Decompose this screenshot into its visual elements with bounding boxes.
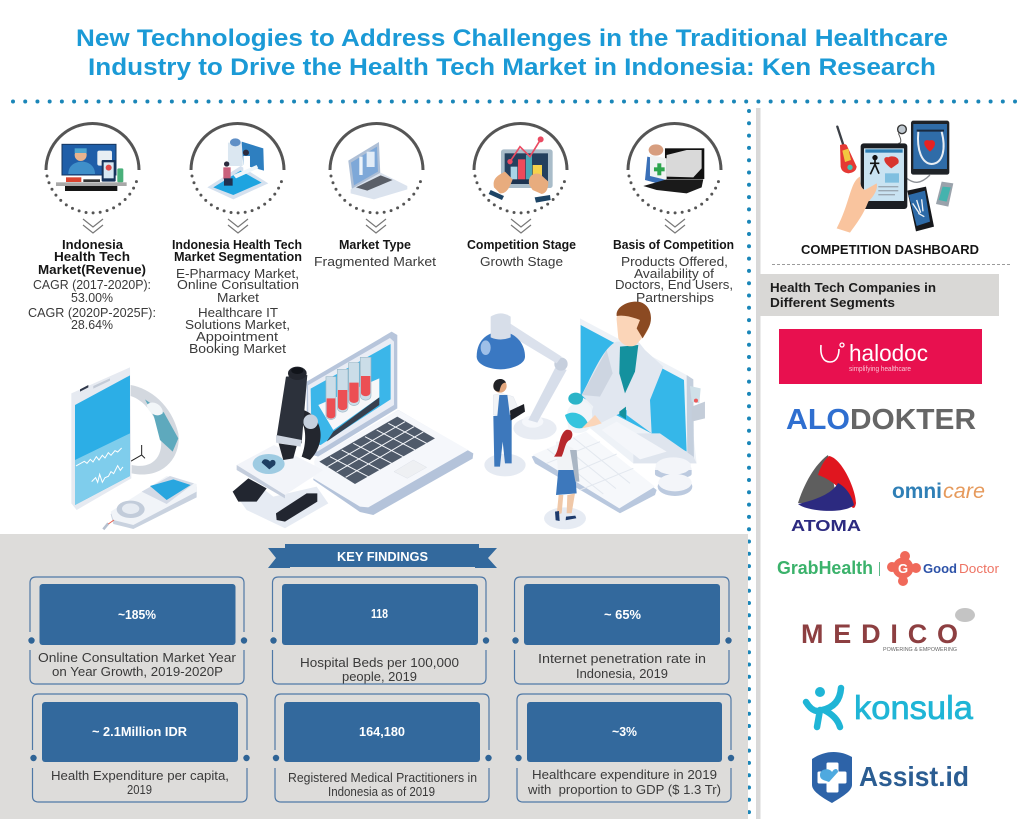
logo: alodokter: DOKTER: [850, 404, 976, 436]
icon: telehealth monitor: [46, 124, 139, 233]
card: hospital beds: people, 2019: [342, 670, 417, 684]
logo: konsula: [806, 687, 974, 727]
heading: market revenue: Indonesia: [62, 238, 124, 252]
card: healthcare expenditure: [515, 694, 734, 802]
heading: health tech companies: Health Tech Companies in: [770, 280, 936, 295]
card: medical practitioners: [273, 694, 492, 802]
logo: omnicare: omni: [892, 480, 942, 503]
text: segments list: Solutions Market,: [185, 318, 290, 332]
card: hospital beds: Hospital Beds per 100,000: [300, 656, 459, 670]
card: internet penetration: [512, 577, 732, 684]
panel: basis of competition column 5: [613, 124, 734, 305]
card: hospital beds: [270, 577, 489, 684]
text: segments list: Appointment: [196, 330, 279, 344]
logo: medico: POWERING & EMPOWERING: [883, 647, 957, 653]
card: hospital beds: 118: [371, 607, 388, 621]
text: CAGR values: CAGR (2017-2020P):: [33, 278, 151, 292]
logo: omnicare: care: [943, 480, 985, 503]
logo: assist.id: [812, 752, 969, 803]
panel: market type column 3: [314, 124, 437, 269]
text: segments list: Healthcare IT: [198, 306, 278, 320]
card: healthcare expenditure: with proportion to GDP ($ 1.3 Tr): [527, 783, 721, 797]
card: online consultation growth: Online Consultation Market Year: [38, 651, 236, 665]
logo: good doctor: [887, 551, 999, 586]
card: medical practitioners: Indonesia as of 2019: [328, 785, 435, 799]
logo: alodokter: ALO: [786, 404, 850, 436]
logo: halodoc: halodoc: [849, 340, 928, 366]
text: bases list: Doctors, End Users,: [615, 278, 733, 292]
text: bases list: [615, 255, 733, 305]
logo: assist.id: Assist.id: [859, 761, 969, 792]
card: medical practitioners: 164,180: [359, 725, 405, 739]
text: segments list: [176, 267, 299, 356]
icon: laptop: [330, 124, 423, 233]
text: segments list: Market: [217, 291, 260, 305]
card: health expenditure: ~ 2.1Million IDR: [92, 725, 187, 739]
card: health expenditure: [30, 694, 250, 802]
logo: good doctor: Doctor: [959, 562, 999, 576]
card: medical practitioners: Registered Medical Practitioners in: [288, 771, 477, 785]
logo: omnicare: [892, 480, 985, 503]
heading: basis of competition: Basis of Competition: [613, 238, 734, 252]
ribbon: key findings heading: KEY FINDINGS: [337, 549, 428, 564]
icon: online consultation phone: [191, 124, 284, 233]
text: bases list: Partnerships: [636, 291, 714, 305]
icon: tablet with chart: [474, 124, 567, 233]
heading: market revenue: Market(Revenue): [38, 263, 146, 277]
icon: doctor in laptop: [628, 124, 721, 233]
heading: market type: Market Type: [339, 238, 411, 252]
panel: key findings: [0, 534, 748, 819]
text: CAGR values: [28, 278, 156, 332]
text: bases list: Products Offered,: [621, 255, 728, 269]
card: internet penetration: Internet penetration rate in: [538, 652, 706, 666]
illustration: microscope and laptop: [233, 332, 473, 528]
card: healthcare expenditure: Healthcare expenditure in 2019: [532, 768, 717, 782]
text: bases list: Availability of: [634, 267, 715, 281]
card: online consultation growth: on Year Growth, 2019-2020P: [52, 665, 223, 679]
logo: halodoc: [779, 329, 982, 384]
heading: market revenue: [38, 238, 146, 277]
panel: competition stage column 4: [467, 124, 576, 269]
logo: medico: [801, 608, 975, 653]
card: internet penetration: ~ 65%: [604, 608, 641, 622]
text: segments list: Online Consultation: [177, 278, 299, 292]
illustration: doctor in monitor with lamp and people: [477, 302, 705, 529]
logo: medico: MEDICO: [801, 619, 958, 649]
text: CAGR values: 53.00%: [71, 291, 113, 305]
card: internet penetration: Indonesia, 2019: [576, 667, 668, 681]
card: healthcare expenditure: ~3%: [612, 725, 637, 739]
panel: market overview column 1: [28, 124, 156, 332]
logo: alodokter: [786, 404, 976, 436]
card: health expenditure: Health Expenditure per capita,: [51, 769, 229, 783]
text: CAGR values: CAGR (2020P-2025F):: [28, 306, 156, 320]
heading: market segmentation: Indonesia Health Tech: [172, 238, 302, 252]
logo: konsula: konsula: [854, 689, 974, 726]
title: Industry to Drive the Health Tech Market in Indonesia: Ken Research: [88, 54, 936, 81]
panel: market segmentation column 2: [172, 124, 302, 356]
heading: competition stage: Competition Stage: [467, 238, 576, 252]
logo: good doctor: G: [898, 561, 908, 576]
heading: market segmentation: [172, 238, 302, 264]
card: online consultation growth: ~185%: [118, 608, 156, 622]
title: [76, 25, 948, 81]
heading: health tech companies: Different Segments: [770, 295, 895, 310]
heading: health tech companies: [760, 274, 999, 316]
text: growth stage: Growth Stage: [480, 255, 563, 269]
illustration: medical devices and hand: [837, 121, 953, 233]
card: online consultation growth: [28, 577, 247, 684]
logo: halodoc: simplifying healthcare: [849, 366, 911, 373]
logo: good doctor: Good: [923, 562, 957, 576]
illustration: smartphone, band and glucose meter: [71, 367, 197, 529]
card: health expenditure: 2019: [127, 783, 152, 797]
ribbon: key findings heading: [268, 544, 497, 568]
text: CAGR values: 28.64%: [71, 318, 113, 332]
heading: market revenue: Health Tech: [54, 250, 130, 264]
title: New Technologies to Address Challenges in the Traditional Healthcare: [76, 25, 948, 52]
logo: grabhealth: GrabHealth: [777, 558, 873, 578]
text: segments list: Booking Market: [189, 342, 287, 356]
heading: competition dashboard: COMPETITION DASHBOARD: [801, 242, 979, 257]
logo: atoma: [791, 455, 862, 535]
logo: atoma: ATOMA: [791, 518, 862, 535]
heading: market segmentation: Market Segmentation: [174, 250, 302, 264]
text: segments list: E-Pharmacy Market,: [176, 267, 299, 281]
text: fragmented market: Fragmented Market: [314, 255, 437, 269]
